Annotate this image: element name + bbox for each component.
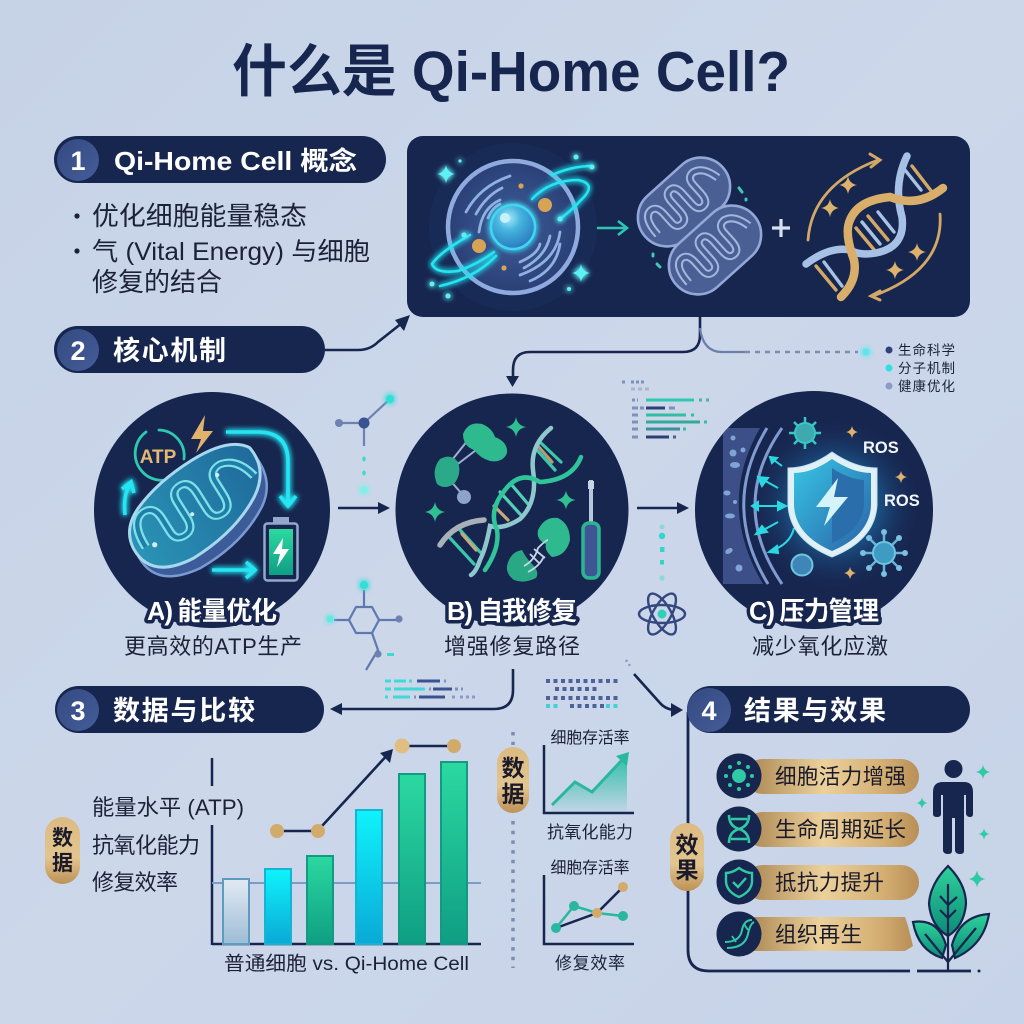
section 1 bullet text	[74, 201, 370, 297]
section 2 header pill	[54, 326, 325, 373]
section 1 bullet text: 优化细胞能量稳态	[92, 201, 307, 231]
metrics text: 修复效率	[92, 870, 178, 895]
icon: germ bottom	[860, 529, 908, 577]
gold tag: data center: 据	[502, 781, 524, 807]
section 1 header pill	[54, 136, 386, 183]
result item: lifespan: 生命周期延长	[775, 818, 906, 842]
icon: DNA with gold arrows	[806, 154, 943, 300]
section 1 bullet text: 气 (Vital Energy) 与细胞	[92, 238, 370, 266]
metrics text	[92, 795, 244, 895]
dot matrix	[546, 681, 620, 706]
gold tag: data center	[497, 747, 529, 813]
molecule icon hexagon	[327, 581, 403, 670]
data bars top	[622, 382, 709, 437]
icon: mitochondrion	[110, 430, 291, 593]
label B	[444, 596, 580, 659]
arrows: energy flow	[122, 432, 296, 578]
legend: 健康优化	[898, 378, 955, 394]
panel: C stress management	[695, 391, 933, 629]
connector: to section 4	[626, 660, 683, 717]
section 3 header pill: 3	[70, 696, 86, 726]
connector: B to section 3	[330, 669, 513, 715]
gold tag: effects	[670, 823, 704, 891]
section 3 header pill	[55, 686, 324, 733]
line chart: viability: 细胞存活率	[550, 729, 630, 747]
section 4 header pill: 4	[701, 696, 717, 726]
result item: lifespan	[716, 806, 919, 852]
molecule icon top	[335, 395, 394, 494]
section 4 frame	[688, 712, 971, 971]
result item: vitality: 细胞活力增强	[775, 765, 906, 789]
label A: A) 能量优化	[147, 596, 277, 626]
icon: ball	[792, 554, 812, 576]
result item: vitality	[716, 754, 919, 798]
legend: 生命科学	[898, 342, 955, 358]
label B: 增强修复路径	[444, 634, 580, 659]
chart axis caption: 普通细胞 vs. Qi-Home Cell	[224, 953, 469, 975]
icon: cell membrane	[723, 428, 782, 584]
icon: ATP ring	[135, 430, 184, 480]
icon: person	[933, 760, 973, 854]
section 4 header pill: 结果与效果	[744, 696, 886, 726]
icon: lightning	[191, 415, 213, 453]
icon: molecules	[435, 423, 507, 504]
section 2 header pill: 核心机制	[113, 336, 226, 366]
section 4 header pill	[687, 686, 970, 733]
panel: B self repair	[396, 394, 628, 626]
arrows: ROS deflection	[752, 457, 794, 553]
line chart: repair: 细胞存活率	[550, 859, 630, 877]
section 2 header pill: 2	[70, 336, 86, 366]
result item: resistance: 抵抗力提升	[775, 871, 884, 895]
plus sign	[772, 219, 790, 237]
section 1 header pill: Qi-Home Cell 概念	[114, 146, 357, 176]
label A: 更高效的ATP生产	[124, 634, 302, 659]
icon: plant	[913, 866, 989, 971]
bar chart: comparison	[212, 758, 481, 945]
sparkles	[425, 417, 576, 522]
arrow: cell to mitochondria	[597, 221, 627, 235]
accent dashes	[653, 188, 746, 267]
icon: ATP ring: ATP	[140, 447, 177, 468]
label A	[124, 596, 302, 659]
label B: B) 自我修复	[447, 596, 577, 626]
gold sparkles	[844, 426, 907, 579]
connector: dashed line to legend	[700, 328, 870, 356]
result item: regeneration: 组织再生	[775, 923, 862, 947]
gold tag: data left: 数	[52, 827, 73, 850]
ROS labels	[863, 439, 920, 510]
metrics text: 抗氧化能力	[92, 833, 200, 858]
icon: screwdriver	[583, 480, 599, 578]
section 3 header pill: 数据与比较	[113, 696, 255, 726]
gold tag: data left: 据	[52, 852, 73, 875]
section 1 bullet text: 修复的结合	[92, 267, 222, 297]
arrow: mechanism to panel	[325, 315, 410, 350]
data bars under B	[385, 681, 475, 697]
line chart: viability: 抗氧化能力	[547, 823, 633, 842]
panel: concept illustration	[407, 136, 970, 317]
panel: A energy optimization	[94, 392, 330, 628]
icon: mitochondria pair	[626, 146, 773, 306]
icon: glowing cell	[429, 143, 597, 311]
dotted vertical divider	[511, 732, 515, 968]
ROS labels: ROS	[863, 439, 899, 457]
connector: panel down to B	[506, 317, 700, 387]
dotted line and atom icon	[639, 524, 685, 638]
line chart: repair	[544, 859, 634, 973]
gold tag: data left	[45, 817, 80, 884]
title: 什么是 Qi-Home Cell?	[232, 40, 790, 104]
sparkles around person	[916, 765, 990, 888]
gold tag: effects: 效	[676, 832, 698, 858]
metrics text: 能量水平 (ATP)	[92, 795, 244, 820]
result item: regeneration	[716, 912, 913, 956]
arrow B to C	[637, 502, 689, 514]
arrow A to B	[338, 502, 390, 514]
line chart: viability	[544, 729, 634, 842]
legend: 分子机制	[898, 361, 955, 376]
line chart: repair: 修复效率	[555, 954, 625, 973]
label C: C) 压力管理	[749, 596, 879, 626]
icon: germ top	[789, 417, 821, 449]
section 1 header pill: 1	[70, 146, 86, 176]
legend	[886, 342, 955, 394]
icon: repair blobs	[507, 518, 570, 582]
label C: 减少氧化应激	[752, 634, 888, 659]
icon: battery	[264, 517, 298, 580]
ROS labels: ROS	[884, 492, 920, 510]
gold tag: effects: 果	[676, 857, 698, 883]
icon: shield	[788, 452, 877, 557]
trend arrow	[270, 738, 461, 838]
icon: DNA helix	[440, 428, 581, 575]
label C	[749, 596, 888, 659]
result item: resistance	[716, 860, 919, 904]
gold tag: data center: 数	[502, 755, 524, 781]
